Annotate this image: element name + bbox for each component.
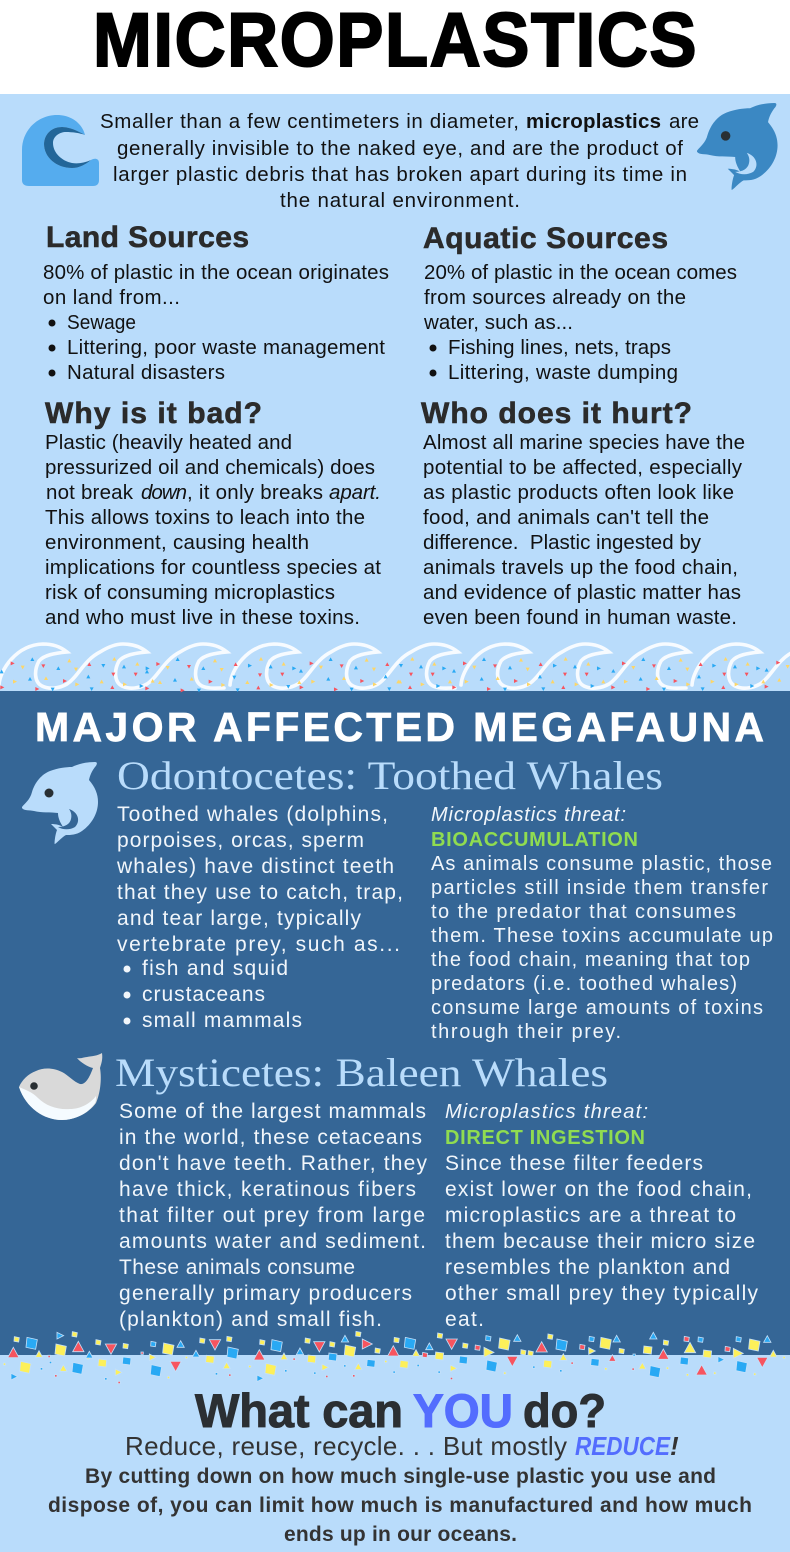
text block: intro: are: [669, 110, 699, 133]
heading: mysticetes: Mysticetes: Baleen Whales: [115, 1050, 608, 1095]
heading: major affected megafauna: MAJOR AFFECTED MEGAFAUNA: [35, 704, 764, 750]
section: why is it bad: risk of consuming microplastics: [45, 581, 335, 604]
heading: land sources: Land Sources: [46, 221, 249, 254]
text block: intro: generally invisible to the naked eye, and are the product of: [117, 137, 683, 160]
text block: bioaccumulation threat: predators (i.e. toothed whales): [431, 973, 737, 995]
section: land sources: Littering, poor waste management: [67, 336, 385, 359]
section: why is it bad: [45, 397, 381, 629]
panel: what are microplastics and why they matter: [0, 94, 790, 691]
text block: bioaccumulation threat: BIOACCUMULATION: [431, 829, 638, 851]
text block: toothed whales description: and tear large, typically: [117, 907, 362, 930]
text block: toothed whales description: [116, 803, 403, 1032]
text block: toothed whales description: Toothed whales (dolphins,: [117, 803, 388, 826]
text block: bioaccumulation threat: through their prey.: [431, 1021, 621, 1043]
text block: intro: Smaller than a few centimeters in diameter,: [100, 110, 519, 133]
text block: baleen whales description: in the world, these cetaceans: [119, 1126, 422, 1149]
heading: what can you do: YOU: [413, 1384, 513, 1437]
decorative band: waves with confetti: [0, 644, 790, 692]
text block: bioaccumulation threat: consume large amounts of toxins: [431, 997, 763, 1019]
title banner: MICROPLASTICS: [93, 0, 697, 83]
heading: why is it bad: Why is it bad?: [45, 397, 262, 430]
text block: baleen whales description: [119, 1100, 428, 1331]
icon: light dolphin: [22, 762, 98, 844]
section: why is it bad: Plastic (heavily heated and: [45, 431, 292, 454]
text block: reduce reuse recycle: Reduce, reuse, recycle. . . But mostly: [125, 1431, 567, 1461]
text block: toothed whales description: whales) have distinct teeth: [116, 855, 394, 878]
section: who does it hurt: as plastic products often look like: [423, 481, 734, 504]
text block: direct ingestion threat: eat.: [445, 1308, 484, 1331]
heading: what can you do: What can: [195, 1384, 403, 1437]
text block: baleen whales description: These animals consume: [119, 1256, 355, 1279]
text block: toothed whales description: crustaceans: [142, 983, 265, 1006]
section: land sources: 80% of plastic in the ocean originates: [43, 261, 389, 284]
text block: baleen whales description: don't have teeth. Rather, they: [119, 1152, 428, 1175]
text block: bioaccumulation threat: them. These toxins accumulate up: [431, 925, 773, 947]
text block: baleen whales description: that filter out prey from large: [119, 1204, 425, 1227]
section: aquatic sources: Littering, waste dumping: [448, 361, 678, 384]
text block: toothed whales description: that they use to catch, trap,: [117, 881, 403, 904]
section: who does it hurt: even been found in human waste.: [423, 606, 737, 629]
section: land sources: on land from...: [43, 286, 180, 309]
text block: direct ingestion threat: them because their micro size: [445, 1230, 755, 1253]
section: why is it bad: and who must live in these toxins.: [45, 606, 360, 629]
text block: bioaccumulation threat: the food chain, meaning that top: [431, 949, 750, 971]
section: aquatic sources: 20% of plastic in the ocean comes: [424, 261, 737, 284]
text block: direct ingestion threat: [445, 1101, 758, 1331]
section: why is it bad: down: [141, 481, 187, 504]
heading: what can you do: [195, 1384, 606, 1437]
text block: baleen whales description: amounts water and sediment.: [119, 1230, 426, 1253]
section: who does it hurt: difference. Plastic ingested by: [423, 531, 702, 554]
text block: call to action: ends up in our oceans.: [284, 1523, 517, 1546]
text block: intro: the natural environment.: [280, 189, 520, 212]
section: why is it bad: , it only breaks: [187, 481, 323, 504]
text block: direct ingestion threat: microplastics are a threat to: [445, 1204, 736, 1227]
section: why is it bad: implications for countless species at: [45, 556, 381, 579]
section: who does it hurt: and evidence of plastic matter has: [423, 581, 741, 604]
text block: bioaccumulation threat: to the predator that consumes: [431, 901, 736, 923]
text block: reduce reuse recycle: REDUCE: [575, 1431, 671, 1461]
text block: direct ingestion threat: DIRECT INGESTION: [445, 1127, 645, 1149]
text block: direct ingestion threat: resembles the plankton and: [445, 1256, 730, 1279]
section: land sources: Natural disasters: [67, 361, 225, 384]
icon: wave: [22, 115, 99, 186]
section: land sources: [43, 221, 389, 384]
section: why is it bad: environment, causing health: [45, 531, 309, 554]
decorative band: confetti: [3, 1331, 785, 1384]
text block: bioaccumulation threat: Microplastics threat:: [431, 804, 626, 826]
text block: bioaccumulation threat: As animals consume plastic, those: [431, 853, 772, 875]
section: why is it bad: pressurized oil and chemicals) does: [45, 456, 375, 479]
section: aquatic sources: from sources already on the: [424, 286, 686, 309]
text block: toothed whales description: fish and squid: [142, 957, 288, 980]
section: who does it hurt: food, and animals can't tell the: [423, 506, 709, 529]
section: why is it bad: This allows toxins to leach into the: [45, 506, 365, 529]
text block: call to action: dispose of, you can limit how much is manufactured and how much: [48, 1494, 752, 1517]
icon: blue dolphin: [697, 103, 778, 190]
text block: baleen whales description: generally primary producers: [119, 1282, 412, 1305]
section: who does it hurt: potential to be affected, especially: [423, 456, 743, 479]
text block: reduce reuse recycle: !: [670, 1431, 679, 1461]
section: why is it bad: not break: [46, 481, 134, 504]
text block: direct ingestion threat: exist lower on the food chain,: [445, 1178, 752, 1201]
text block: intro: microplastics: [526, 110, 661, 133]
section: who does it hurt: Almost all marine species have the: [423, 431, 745, 454]
title banner: [0, 0, 790, 94]
text block: bioaccumulation threat: [431, 804, 773, 1043]
section: who does it hurt: [421, 397, 745, 629]
heading: odontocetes: Odontocetes: Toothed Whales: [117, 753, 663, 798]
text block: bioaccumulation threat: particles still inside them transfer: [431, 877, 768, 899]
section: land sources: Sewage: [67, 311, 136, 334]
section: aquatic sources: water, such as...: [423, 311, 573, 334]
text block: call to action: By cutting down on how much single-use plastic you use and: [85, 1465, 716, 1488]
text block: intro: [100, 110, 699, 212]
text block: toothed whales description: porpoises, orcas, sperm: [117, 829, 364, 852]
icon: whale: [19, 1053, 102, 1120]
section: why is it bad: apart.: [329, 481, 381, 504]
section: aquatic sources: Fishing lines, nets, traps: [448, 336, 671, 359]
text block: toothed whales description: vertebrate prey, such as...: [117, 933, 400, 956]
heading: aquatic sources: Aquatic Sources: [423, 222, 668, 255]
text block: direct ingestion threat: Since these filter feeders: [445, 1152, 703, 1175]
text block: call to action: [48, 1465, 752, 1546]
text block: baleen whales description: Some of the largest mammals: [119, 1100, 426, 1123]
heading: what can you do: do?: [523, 1384, 606, 1437]
heading: who does it hurt: Who does it hurt?: [421, 397, 692, 430]
panel: what can you do: [0, 1331, 790, 1552]
text block: toothed whales description: small mammals: [142, 1009, 302, 1032]
text block: direct ingestion threat: Microplastics threat:: [445, 1101, 648, 1123]
text block: direct ingestion threat: other small prey they typically: [445, 1282, 758, 1305]
text block: intro: larger plastic debris that has broken apart during its time in: [113, 163, 687, 186]
panel: major affected megafauna: [0, 691, 790, 1355]
text block: baleen whales description: have thick, keratinous fibers: [119, 1178, 416, 1201]
section: who does it hurt: animals travels up the food chain,: [423, 556, 738, 579]
text block: baleen whales description: (plankton) and small fish.: [119, 1308, 382, 1331]
section: aquatic sources: [423, 222, 737, 384]
